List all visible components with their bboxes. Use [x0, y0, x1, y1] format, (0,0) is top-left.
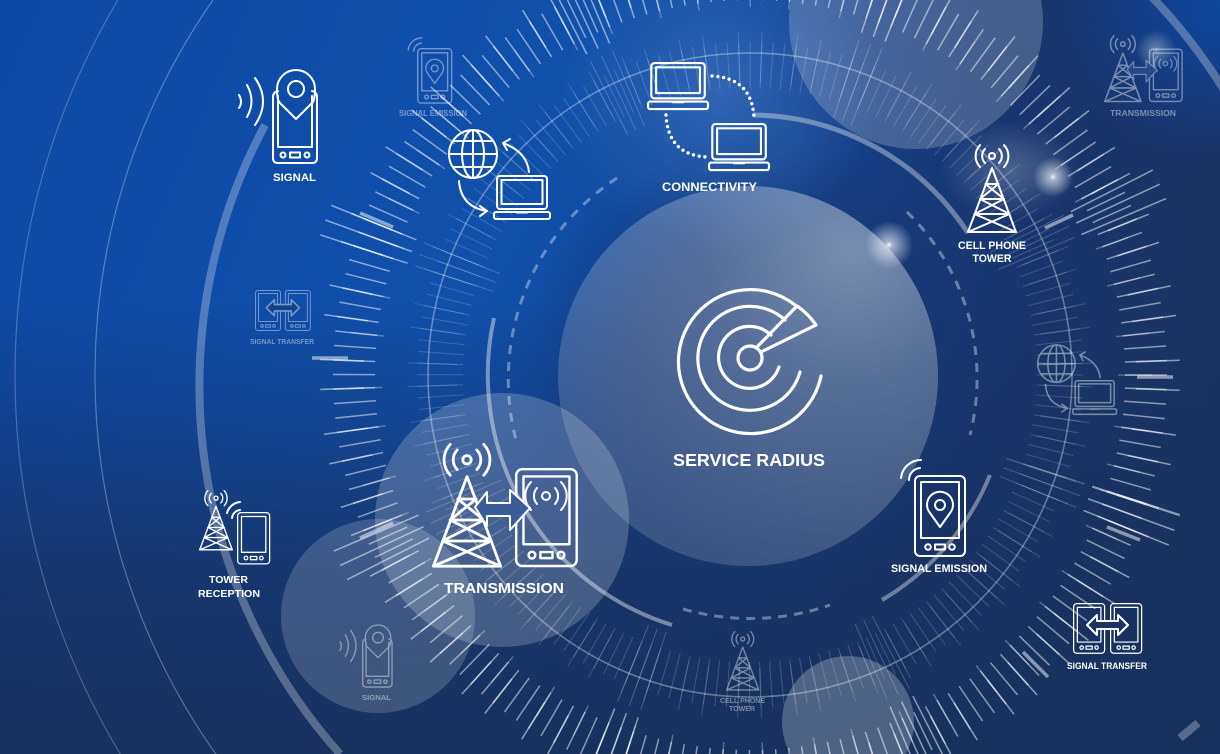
label: cell phone tower: CELL PHONE	[958, 240, 1026, 252]
label: faded cell phone tower: TOWER	[729, 706, 755, 713]
icon: globe and laptop	[449, 130, 550, 219]
light flares	[865, 30, 1176, 269]
label: transmission: TRANSMISSION	[444, 580, 564, 597]
thick accent ticks	[312, 213, 1173, 677]
label: faded signal: SIGNAL	[362, 693, 391, 702]
icon: radar	[678, 290, 821, 434]
icon: faded signal transfer	[256, 291, 310, 330]
label: signal: SIGNAL	[273, 172, 316, 184]
heading: service radius: SERVICE RADIUS	[673, 450, 825, 470]
label: cell phone tower: TOWER	[972, 253, 1012, 265]
label: connectivity: CONNECTIVITY	[662, 182, 757, 194]
icon: signal transfer	[1074, 604, 1142, 653]
label: tower reception: TOWER	[209, 574, 248, 586]
label: faded signal transfer: SIGNAL TRANSFER	[250, 337, 315, 346]
icon: signal emission	[901, 460, 965, 556]
label: faded signal emission: SIGNAL EMISSION	[399, 109, 467, 118]
label: signal emission: SIGNAL EMISSION	[891, 563, 987, 575]
icon: connected laptops	[648, 63, 769, 170]
icon: faded transmission	[1105, 36, 1182, 102]
icon: faded globe and laptop	[1038, 345, 1116, 414]
label: faded transmission: TRANSMISSION	[1110, 108, 1176, 118]
icon: faded cell phone tower	[727, 632, 759, 690]
icon: signal	[239, 70, 317, 163]
central circle	[558, 186, 938, 566]
icon: faded signal	[340, 625, 392, 687]
icon: tower reception	[200, 491, 270, 564]
icon: transmission	[433, 444, 577, 566]
label: faded cell phone tower: CELL PHONE	[720, 698, 765, 705]
icon: faded signal emission	[408, 38, 452, 103]
label: signal transfer: SIGNAL TRANSFER	[1067, 661, 1147, 672]
translucent circles	[281, 0, 1080, 754]
label: tower reception: RECEPTION	[198, 588, 260, 600]
icon: cell phone tower	[968, 145, 1016, 232]
